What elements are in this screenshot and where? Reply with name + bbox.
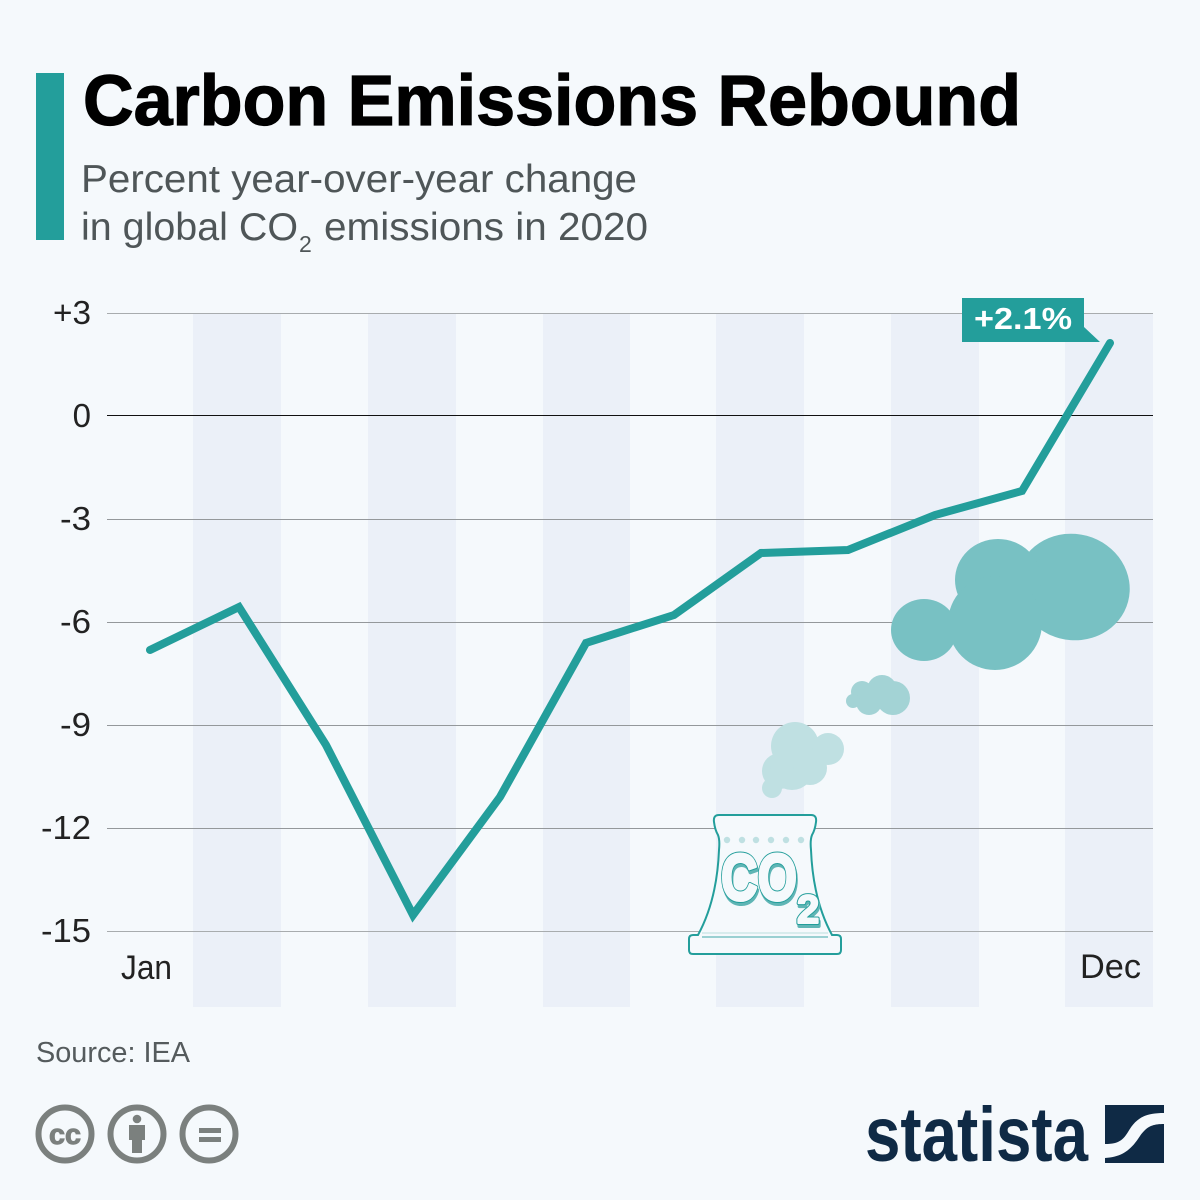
icon: cc xyxy=(38,1108,92,1160)
x-axis labels: Dec xyxy=(1080,948,1141,986)
CO2 lettering: CO xyxy=(721,840,797,914)
icon: statista logo xyxy=(1105,1105,1164,1163)
small smoke cloud xyxy=(762,722,844,798)
CO2 lettering: 2 xyxy=(797,888,819,932)
subtitle: in global CO xyxy=(81,206,298,249)
CO2 lettering: CO xyxy=(721,840,797,914)
CO2 lettering: 2 xyxy=(798,891,820,935)
source: Source: IEA xyxy=(36,1037,191,1069)
callout: +2.1% xyxy=(962,298,1100,342)
icon: no derivatives xyxy=(182,1108,236,1160)
y-axis labels xyxy=(41,294,91,949)
statista wordmark: statista xyxy=(865,1092,1089,1178)
icon: cc: cc xyxy=(49,1119,81,1151)
icon: cooling tower with CO2 xyxy=(689,815,841,954)
line chart xyxy=(41,294,1153,1007)
subtitle xyxy=(81,158,648,257)
medium smoke cloud xyxy=(846,675,910,715)
icon: creative commons licence xyxy=(38,1108,236,1160)
accent bar xyxy=(36,73,64,240)
x-axis labels: Jan xyxy=(121,949,172,987)
y-axis labels: -6 xyxy=(60,603,91,640)
callout: +2.1%: +2.1% xyxy=(974,301,1072,336)
x-axis labels xyxy=(121,948,1141,987)
y-axis labels: 0 xyxy=(73,397,91,434)
subtitle: Percent year-over-year change xyxy=(81,158,637,201)
y-axis labels: -9 xyxy=(60,706,91,743)
gridlines xyxy=(107,314,1153,932)
y-axis labels: +3 xyxy=(53,294,91,331)
title: Carbon Emissions Rebound xyxy=(83,62,1021,141)
CO2 lettering: CO xyxy=(722,843,798,917)
tower base lines xyxy=(702,933,828,937)
big smoke cloud xyxy=(891,521,1142,670)
alternating month bands xyxy=(193,313,1153,1007)
subtitle: emissions in 2020 xyxy=(324,206,648,249)
tower dots xyxy=(724,837,804,843)
icon: attribution xyxy=(110,1108,164,1160)
data line xyxy=(150,343,1110,915)
y-axis labels: -15 xyxy=(41,912,91,949)
y-axis labels: -12 xyxy=(41,809,91,846)
subtitle: 2 xyxy=(299,231,312,257)
y-axis labels: -3 xyxy=(60,500,91,537)
CO2 lettering: 2 xyxy=(797,888,819,932)
